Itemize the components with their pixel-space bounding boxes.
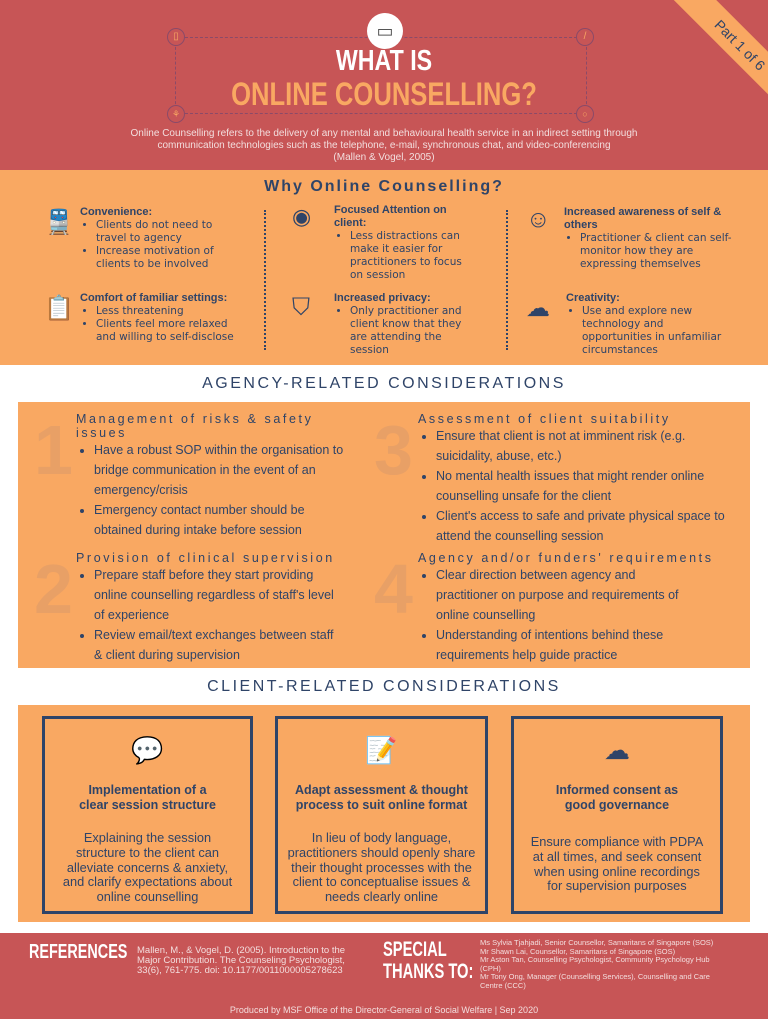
intro text: (Mallen & Vogel, 2005) — [333, 152, 435, 163]
item 3: Assessment of client suitability — [418, 412, 671, 426]
corner icons: ▯ — [173, 31, 179, 42]
item: comfort: Clients feel more relaxed and willing to self-disclose — [96, 318, 234, 343]
icon: devices — [367, 13, 403, 49]
item: awareness — [526, 206, 732, 270]
special thanks: SPECIAL — [383, 938, 447, 961]
item: awareness: Increased awareness of self & others — [564, 206, 721, 231]
footer: Ms Sylvia Tjahjadi, Senior Counsellor, Samaritans of Singapore (SOS) — [480, 938, 713, 947]
item: focused attention: ◉ — [292, 204, 311, 229]
item 4 — [374, 550, 714, 662]
heading: client: CLIENT-RELATED CONSIDERATIONS — [207, 678, 561, 695]
card 2 — [275, 716, 488, 914]
item: privacy: ⛉ — [292, 294, 310, 321]
item 1: Have a robust SOP within the organisation to bridge communication in the event of an emergency/crisis — [94, 443, 343, 497]
panel: client — [18, 705, 750, 922]
card 3 — [511, 716, 723, 914]
item: comfort: Comfort of familiar settings: — [80, 292, 227, 304]
item 3: No mental health issues that might render online counselling unsafe for the client — [436, 469, 704, 503]
special thanks: THANKS TO: — [383, 960, 473, 983]
item: creativity: Creativity: — [566, 292, 620, 304]
card 3: Ensure compliance with PDPA at all times, and seek consent when using online recordings for supervision purposes — [531, 834, 703, 893]
header — [0, 0, 768, 170]
footer: Mr Aston Tan, Counselling Psychologist, Community Psychology Hub (CPH) — [480, 955, 710, 972]
item 4: 4 — [374, 550, 413, 628]
panel: agency — [18, 402, 750, 668]
item: creativity — [526, 292, 722, 356]
credit: Produced by MSF Office of the Director-General of Social Welfare | Sep 2020 — [230, 1005, 538, 1015]
heading: agency: AGENCY-RELATED CONSIDERATIONS — [202, 375, 566, 392]
item 2: Prepare staff before they start providing online counselling regardless of staff's level of experience — [94, 568, 334, 622]
footer: Mr Tony Ong, Manager (Counselling Services), Counselling and Care Centre (CCC) — [480, 972, 710, 990]
item 2: Review email/text exchanges between staff & client during supervision — [94, 628, 333, 662]
header: ONLINE COUNSELLING? — [231, 76, 537, 112]
card 1 — [42, 716, 253, 914]
item 3: Ensure that client is not at imminent risk (e.g. suicidality, abuse, etc.) — [436, 429, 685, 463]
ribbon: part 1 of 6 — [652, 0, 768, 133]
item 3 — [374, 411, 725, 543]
item: awareness: ☺ — [526, 206, 551, 233]
item: focused attention: Less distractions can make it easier for practitioners to focus on session — [350, 230, 462, 281]
card 2: In lieu of body language, practitioners should openly share their thought processes with the client to conceptualise issues & needs clearly online — [288, 830, 475, 904]
item: privacy — [292, 292, 462, 356]
item: awareness: Practitioner & client can self-monitor how they are expressing themselves — [580, 232, 732, 270]
intro text — [131, 128, 637, 163]
footer: Mr Shawn Lai, Counsellor, Samaritans of Singapore (SOS) — [480, 946, 675, 956]
title: WHAT IS — [336, 45, 432, 77]
ribbon: part 1 of 6: Part 1 of 6 — [712, 17, 768, 73]
item 1: Management of risks & safety issues — [76, 412, 313, 440]
item 3: 3 — [374, 411, 413, 489]
card 2: 📝 — [365, 735, 398, 765]
card 3: Informed consent as — [556, 783, 678, 797]
item 1: Emergency contact number should be obtained during intake before session — [94, 503, 305, 537]
icon: devices: ▭ — [376, 21, 394, 41]
item 2: 2 — [34, 550, 73, 628]
card 3: ☁ — [604, 735, 630, 765]
intro text: Online Counselling refers to the delivery of any mental and behavioural health service in an indirect setting through communication technologies such as the telephone, e-mail, synchronous chat, and video-conferencing — [131, 128, 637, 151]
footer: Mallen, M., & Vogel, D. (2005). Introduction to the Major Contribution. The Counseling Psychologist, 33(6), 761-775. doi: 10.1177/0011000005278623 — [137, 945, 345, 976]
card 2: Adapt assessment & thought — [295, 783, 468, 797]
item: convenience — [44, 206, 214, 270]
item: focused attention: Focused Attention on client: — [334, 204, 447, 229]
item 1 — [34, 411, 343, 537]
item 1: 1 — [34, 411, 73, 489]
item: focused attention — [292, 204, 462, 281]
card 1: clear session structure — [79, 798, 216, 812]
corner icons — [167, 28, 185, 46]
item 3: Client's access to safe and private physical space to attend the counselling session — [436, 509, 725, 543]
item: convenience: Increase motivation of clients to be involved — [96, 245, 214, 270]
item: convenience: 🚆 — [44, 209, 74, 236]
item 2 — [34, 550, 335, 662]
card 1: 💬 — [131, 735, 164, 765]
item 4: Agency and/or funders' requirements — [418, 551, 714, 565]
special thanks — [383, 938, 473, 983]
item 4: Clear direction between agency and practitioner on purpose and requirements of online counselling — [436, 568, 679, 622]
header: ⚘ — [172, 109, 180, 119]
card 1: Implementation of a — [88, 783, 207, 797]
card 2: process to suit online format — [296, 798, 467, 812]
item: convenience: Clients do not need to travel to agency — [96, 219, 212, 244]
item: privacy: Increased privacy: — [334, 292, 431, 304]
dashed frame — [175, 37, 587, 114]
item: comfort — [44, 292, 234, 343]
item: comfort: 📋 — [44, 295, 74, 322]
item: comfort: Less threatening — [96, 305, 184, 317]
card 3: good governance — [565, 798, 669, 812]
item: creativity: ☁ — [526, 295, 550, 322]
footer — [0, 933, 768, 1019]
card 1: Explaining the session structure to the client can alleviate concerns & anxiety, and clarify expectations about online counselling — [63, 830, 232, 904]
item: creativity: Use and explore new technology and opportunities in unfamiliar circumstances — [582, 305, 721, 356]
item 4: Understanding of intentions behind these requirements help guide practice — [436, 628, 663, 662]
panel: why online counselling — [0, 170, 768, 365]
header: / — [584, 31, 586, 42]
item 2: Provision of clinical supervision — [76, 551, 335, 565]
heading: Why Online Counselling? — [264, 178, 504, 195]
references: REFERENCES — [29, 941, 127, 963]
item: privacy: Only practitioner and client know that they are attending the session — [350, 305, 462, 356]
header: ○ — [582, 109, 588, 119]
item: convenience: Convenience: — [80, 206, 152, 218]
